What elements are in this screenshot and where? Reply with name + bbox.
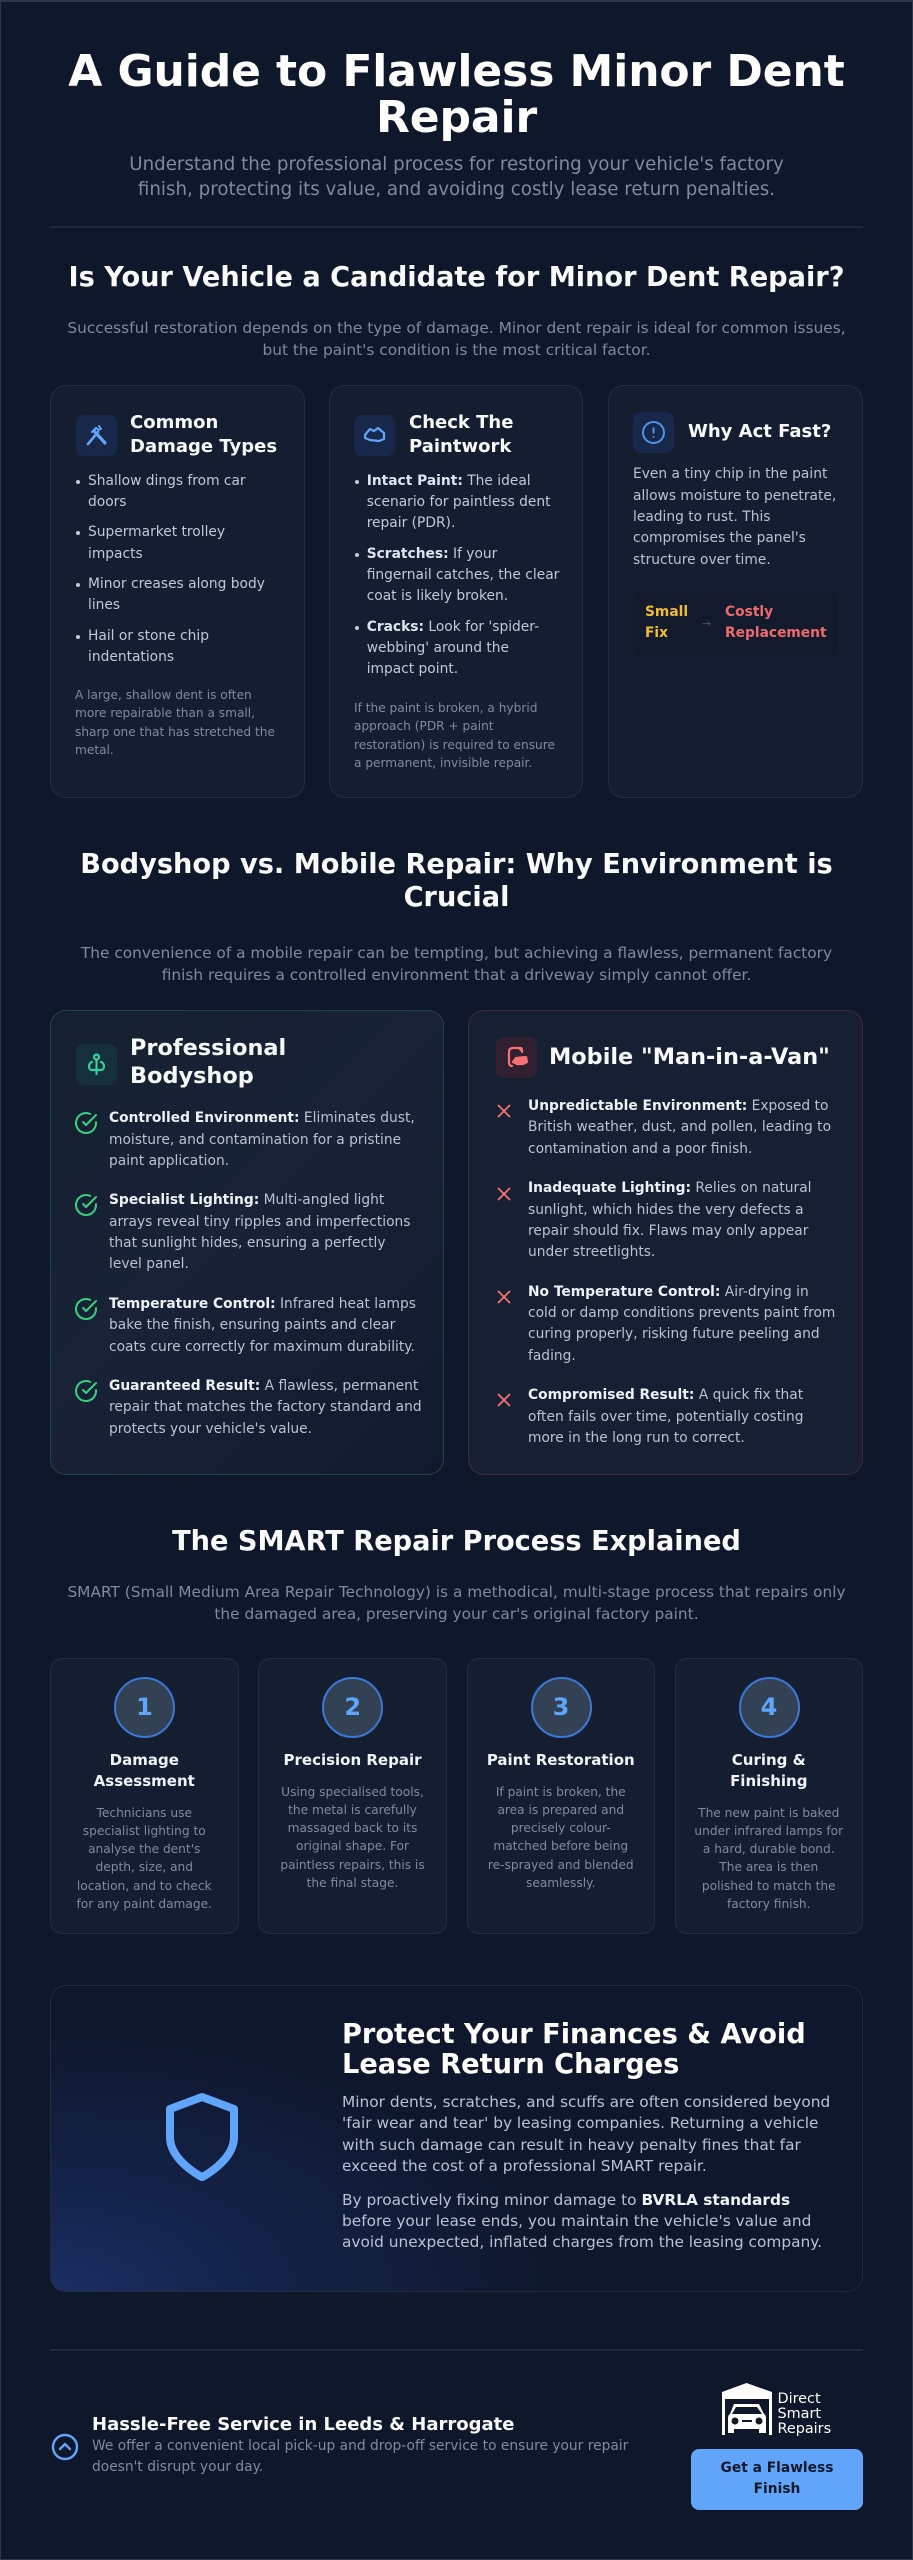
panel: professional bodyshop	[50, 1010, 444, 1475]
number: 4	[761, 1693, 777, 1721]
icon: alert circle	[633, 412, 674, 453]
paragraph 2: avoid unexpected, inflated charges from the leasing company.	[342, 2233, 822, 2251]
label: costly replacement: Replacement	[725, 625, 827, 641]
description: under infrared lamps for	[694, 1824, 843, 1838]
paragraph 2: before your lease ends, you maintain the vehicle's value and	[342, 2212, 811, 2230]
point: no temperature control: cold or damp conditions prevents paint from	[528, 1305, 835, 1321]
icon: check	[74, 1380, 97, 1402]
list: Minor creases along body	[88, 576, 265, 592]
body text: allows moisture to penetrate,	[633, 488, 836, 504]
callout: small fix to costly replacement	[633, 592, 838, 656]
step 2	[258, 1658, 447, 1934]
point: inadequate lighting: under streetlights.	[528, 1244, 655, 1260]
point: no temperature control: curing properly, risking future peeling and	[528, 1326, 820, 1342]
heading: Why Act Fast?	[688, 421, 831, 442]
note: metal.	[75, 743, 114, 757]
description: the metal is carefully	[288, 1803, 417, 1817]
note	[354, 701, 555, 770]
intro: environment section: The convenience of a mobile repair can be tempting, but achieving a flawless, permanent factory	[81, 944, 832, 962]
description	[488, 1784, 634, 1890]
list: indentations	[88, 649, 174, 665]
point: inadequate lighting: repair should fix. Flaws may only appear	[528, 1223, 808, 1239]
heading: Common	[130, 412, 218, 433]
note: restoration) is required to ensure	[354, 738, 555, 752]
list: fingernail catches, the clear	[367, 567, 559, 583]
point: guaranteed result: protects your vehicle's value.	[109, 1421, 312, 1437]
icon: check	[74, 1112, 97, 1134]
title	[730, 1751, 807, 1790]
point: inadequate lighting: Inadequate Lighting: Relies on natural	[528, 1180, 812, 1196]
list	[76, 473, 265, 665]
point: inadequate lighting: sunlight, which hides the very defects a	[528, 1202, 804, 1218]
panel: lease return charges	[50, 1985, 863, 2292]
paragraph 2: By proactively fixing minor damage to BVRLA standards	[342, 2190, 790, 2208]
number	[738, 1677, 800, 1738]
footer heading: Hassle-Free Service in Leeds & Harrogate	[92, 2414, 514, 2435]
logo text: Smart	[778, 2406, 821, 2422]
heading: Bodyshop	[130, 1062, 254, 1088]
number	[322, 1677, 383, 1738]
heading: Professional	[130, 1035, 286, 1061]
note: approach (PDR + paint	[354, 719, 494, 733]
call to action button: Get a Flawless	[721, 2460, 833, 2476]
point: unpredictable environment: contamination and a poor finish.	[528, 1141, 752, 1157]
heading: Check The	[409, 412, 513, 433]
panel: mobile man-in-a-van	[468, 1010, 863, 1475]
point: specialist lighting: that sunlight hides, ensuring a perfectly	[109, 1235, 385, 1251]
title: Precision Repair	[284, 1751, 422, 1769]
number: 1	[136, 1693, 153, 1721]
call to action button: Finish	[754, 2481, 800, 2497]
description: matched before being	[493, 1839, 628, 1853]
description: for any paint damage.	[76, 1897, 212, 1911]
label: small fix: Fix	[645, 625, 668, 641]
icon: cross	[497, 1393, 511, 1407]
description: The area is then	[719, 1860, 818, 1874]
point: temperature control	[109, 1296, 416, 1355]
point: unpredictable environment: Unpredictable Environment: Exposed to	[528, 1098, 828, 1114]
heading	[409, 412, 513, 457]
point: guaranteed result: repair that matches the factory standard and	[109, 1399, 422, 1415]
icon: tools	[76, 415, 117, 456]
list: Hail or stone chip	[88, 628, 209, 644]
icon: check	[74, 1298, 97, 1320]
point: no temperature control: fading.	[528, 1348, 576, 1364]
point: unpredictable environment: British weather, dust, and pollen, leading to	[528, 1119, 831, 1135]
logo mark: garage and car	[721, 2383, 773, 2436]
logo text: Direct	[778, 2390, 821, 2406]
footer text	[92, 2436, 628, 2479]
label: small fix: Small	[645, 604, 688, 620]
icon: cross	[497, 1187, 511, 1201]
logo text: Repairs	[778, 2420, 831, 2436]
point: specialist lighting	[109, 1192, 410, 1272]
list: impacts	[88, 546, 143, 562]
point: temperature control: Temperature Control: Infrared heat lamps	[109, 1296, 416, 1312]
intro: candidate section: Successful restoration depends on the type of damage. Minor dent repair is ideal for common issues,	[67, 319, 846, 337]
panel: common damage types	[50, 385, 305, 798]
icon: shield	[166, 2093, 238, 2181]
point: compromised result: Compromised Result: A quick fix that	[528, 1387, 803, 1403]
heading: environment section	[80, 849, 833, 913]
point: temperature control: bake the finish, ensuring paints and clear	[109, 1317, 395, 1333]
logo text	[778, 2392, 831, 2436]
footer text: We offer a convenient local pick-up and drop-off service to ensure your repair	[92, 2438, 628, 2454]
point: unpredictable environment	[528, 1098, 831, 1157]
logo	[721, 2383, 833, 2436]
intro: smart process: the damaged area, preserving your car's original factory paint.	[214, 1604, 699, 1622]
title	[68, 46, 845, 143]
body text: leading to rust. This	[633, 509, 770, 525]
title: Paint Restoration	[487, 1751, 635, 1769]
heading: Protect Your Finances & Avoid	[342, 2019, 806, 2050]
heading: environment section: Crucial	[404, 882, 509, 913]
description: seamlessly.	[526, 1876, 596, 1890]
point: no temperature control: No Temperature Control: Air-drying in	[528, 1284, 809, 1300]
list: Supermarket trolley	[88, 524, 225, 540]
body text: compromises the panel's	[633, 530, 806, 546]
note: a permanent, invisible repair.	[354, 756, 532, 770]
call to action button	[691, 2449, 863, 2510]
heading	[130, 1035, 286, 1088]
icon: red van	[496, 1037, 537, 1078]
description	[694, 1806, 844, 1911]
note: more repairable than a small,	[75, 706, 255, 720]
intro: environment section	[80, 944, 832, 984]
description: analyse the dent's	[88, 1842, 200, 1856]
description: specialist lighting to	[83, 1824, 206, 1838]
number: 3	[553, 1693, 569, 1721]
point: specialist lighting: Specialist Lighting: Multi-angled light	[109, 1192, 384, 1208]
heading: Lease Return Charges	[342, 2049, 679, 2080]
title: Curing &	[732, 1751, 806, 1769]
list: impact point.	[367, 661, 458, 677]
point: guaranteed result	[109, 1378, 422, 1437]
list: scenario for paintless dent	[367, 494, 551, 510]
icon: car outline	[354, 415, 395, 456]
point: controlled environment	[109, 1110, 415, 1169]
title	[94, 1751, 195, 1790]
list: Cracks: Look for 'spider-	[367, 619, 539, 635]
description: paintless repairs, this is	[280, 1858, 425, 1872]
step 3	[466, 1658, 655, 1934]
description: polished to match the	[702, 1879, 836, 1893]
list: coat is likely broken.	[367, 588, 508, 604]
description: factory finish.	[727, 1897, 811, 1911]
heading: environment section: Bodyshop vs. Mobile Repair: Why Environment is	[80, 849, 833, 880]
note: If the paint is broken, a hybrid	[354, 701, 537, 715]
point: specialist lighting: level panel.	[109, 1256, 189, 1272]
point: controlled environment: Controlled Environment: Eliminates dust,	[109, 1110, 415, 1126]
point: no temperature control	[528, 1284, 835, 1364]
point: temperature control: coats cure correctly for maximum durability.	[109, 1339, 415, 1355]
description: original shape. For	[296, 1839, 409, 1853]
description	[76, 1806, 212, 1911]
paragraph 1: exceed the cost of a professional SMART repair.	[342, 2157, 707, 2175]
panel: why act fast	[608, 385, 863, 798]
description: If paint is broken, the	[496, 1784, 626, 1798]
number: 2	[344, 1693, 361, 1721]
intro: candidate section	[67, 319, 846, 358]
heading	[342, 2019, 806, 2080]
list	[355, 473, 560, 677]
point: compromised result: often fails over time, potentially costing	[528, 1409, 803, 1425]
point: compromised result: more in the long run to correct.	[528, 1430, 745, 1446]
list: doors	[88, 494, 127, 510]
heading: candidate section: Is Your Vehicle a Candidate for Minor Dent Repair?	[68, 262, 844, 293]
list: Scratches: If your	[367, 546, 497, 562]
step 1	[50, 1658, 238, 1934]
point: guaranteed result: Guaranteed Result: A flawless, permanent	[109, 1378, 418, 1394]
label: small fix	[645, 604, 688, 641]
description: Technicians use	[96, 1806, 192, 1820]
point: inadequate lighting	[528, 1180, 812, 1260]
list: lines	[88, 597, 120, 613]
title: Repair	[376, 92, 537, 143]
body text: structure over time.	[633, 552, 771, 568]
title: A Guide to Flawless Minor Dent	[68, 46, 845, 97]
number	[114, 1677, 175, 1738]
note	[75, 688, 275, 757]
intro: candidate section: but the paint's condition is the most critical factor.	[263, 340, 650, 358]
label: costly replacement	[725, 604, 827, 641]
subtitle: finish, protecting its value, and avoiding costly lease return penalties.	[138, 179, 775, 200]
note: sharp one that has stretched the	[75, 725, 275, 739]
paragraph 1	[342, 2092, 830, 2177]
point: compromised result	[528, 1387, 803, 1446]
list: repair (PDR).	[367, 515, 455, 531]
paragraph 2	[342, 2190, 822, 2253]
intro: environment section: finish requires a controlled environment that a driveway simply cannot offer.	[162, 966, 751, 984]
icon: green tool	[76, 1044, 117, 1085]
title: Damage	[110, 1751, 179, 1769]
heading: Mobile "Man-in-a-Van"	[549, 1044, 830, 1070]
description: depth, size, and	[95, 1860, 193, 1874]
heading: Paintwork	[409, 436, 511, 457]
subtitle	[129, 154, 784, 200]
title: Assessment	[94, 1772, 195, 1790]
list: webbing' around the	[367, 640, 509, 656]
icon: check	[74, 1194, 97, 1216]
description: massaged back to its	[288, 1821, 417, 1835]
footer text: doesn't disrupt your day.	[92, 2459, 263, 2475]
paragraph 1: Minor dents, scratches, and scuffs are often considered beyond	[342, 2093, 830, 2111]
icon: chevron circle	[51, 2433, 79, 2461]
point: controlled environment: moisture, and contamination for a pristine	[109, 1132, 401, 1148]
point: specialist lighting: arrays reveal tiny ripples and imperfections	[109, 1214, 410, 1230]
heading: Damage Types	[130, 436, 277, 457]
panel: check the paintwork	[329, 385, 583, 798]
list: Shallow dings from car	[88, 473, 246, 489]
note: A large, shallow dent is often	[75, 688, 252, 702]
step 4	[674, 1658, 863, 1934]
heading: smart process: The SMART Repair Process Explained	[172, 1526, 741, 1557]
heading	[130, 412, 277, 457]
description: The new paint is baked	[698, 1806, 839, 1820]
title: Finishing	[730, 1772, 807, 1790]
number	[530, 1677, 592, 1738]
description: location, and to check	[77, 1879, 212, 1893]
intro: smart process	[67, 1583, 846, 1622]
paragraph 1: with such damage can result in heavy penalty fines that far	[342, 2136, 801, 2154]
icon: cross	[497, 1290, 511, 1304]
description: the final stage.	[307, 1876, 398, 1890]
description: a hard, durable bond.	[703, 1842, 835, 1856]
point: controlled environment: paint application.	[109, 1153, 229, 1169]
description: re-sprayed and blended	[488, 1858, 634, 1872]
list: Intact Paint: The ideal	[367, 473, 531, 489]
body text: Even a tiny chip in the paint	[633, 466, 827, 482]
description: precisely colour-	[511, 1821, 611, 1835]
description	[280, 1784, 425, 1890]
body text	[633, 466, 836, 568]
subtitle: Understand the professional process for restoring your vehicle's factory	[129, 154, 784, 175]
description: area is prepared and	[497, 1803, 624, 1817]
arrow: →	[702, 617, 711, 630]
paragraph 1: 'fair wear and tear' by leasing companies. Returning a vehicle	[342, 2114, 818, 2132]
intro: smart process: SMART (Small Medium Area Repair Technology) is a methodical, multi-stage process that repairs only	[67, 1583, 846, 1601]
label: costly replacement: Costly	[725, 604, 773, 620]
icon: cross	[497, 1104, 511, 1118]
description: Using specialised tools,	[281, 1784, 424, 1798]
